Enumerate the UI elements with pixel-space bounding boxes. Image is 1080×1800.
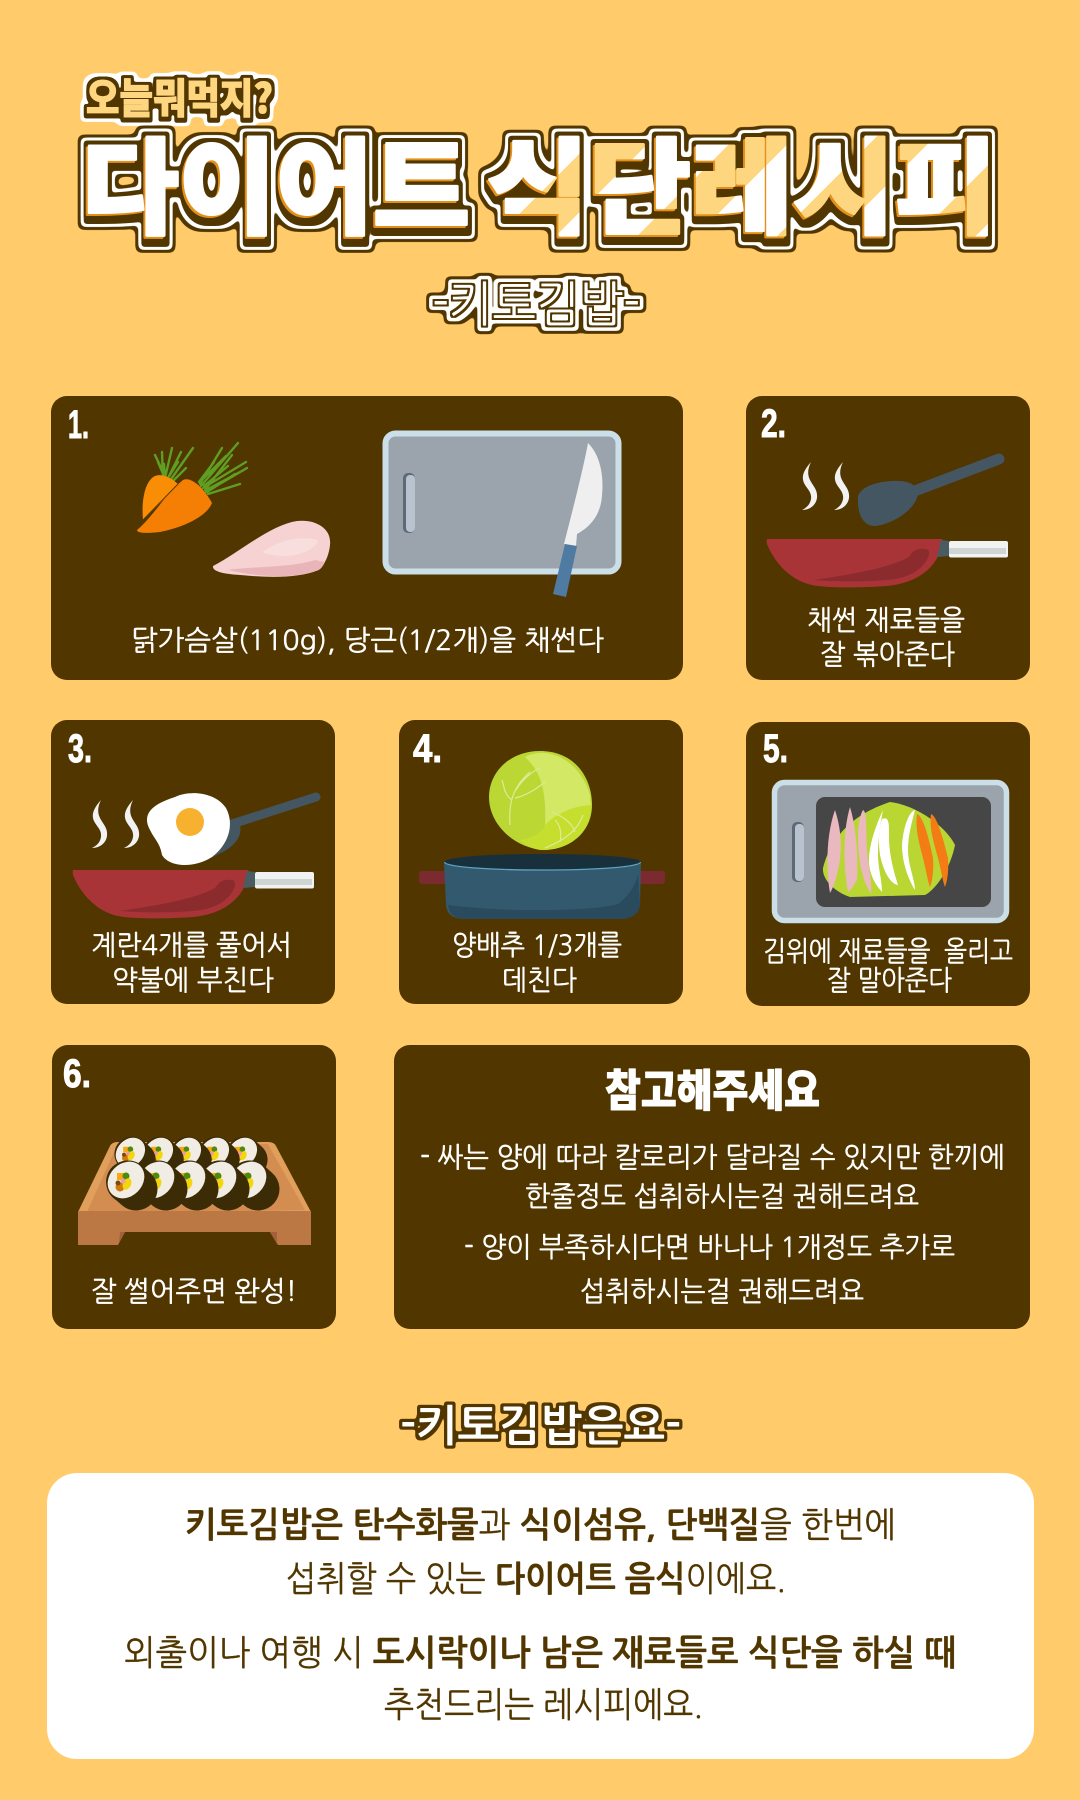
icon: board with kimbap ingredients <box>774 782 1006 920</box>
panel: step 5 <box>746 722 1030 1006</box>
icon: chicken breast <box>213 521 330 577</box>
notes text <box>420 1143 1005 1306</box>
caption: 약불에 부친다 <box>112 966 275 995</box>
caption <box>452 931 622 995</box>
step number 2: 2. <box>761 402 786 446</box>
icon: wooden tray <box>78 1142 311 1245</box>
icon: cutting board <box>386 434 618 572</box>
panel: step 4 <box>399 720 683 1004</box>
summary paragraph 2 <box>124 1635 956 1723</box>
subtitle: 키토김밥: -키토김밥- <box>432 280 640 328</box>
caption: 계란4개를 풀어서 <box>91 931 292 960</box>
caption: 닭가슴살(110g), 당근(1/2개)을 채썬다 <box>131 626 605 655</box>
title: 다이어트 식단레시피 <box>82 65 997 255</box>
icon: spatula <box>858 459 999 526</box>
main title second word: 식단레시피 <box>487 104 997 255</box>
icon: pot <box>419 854 665 919</box>
summary paragraph 2: 외출이나 여행 시 도시락이나 남은 재료들로 식단을 하실 때 <box>124 1635 956 1671</box>
panel: summary <box>47 1473 1034 1759</box>
icon: cabbage <box>489 751 592 850</box>
caption <box>807 606 965 669</box>
summary paragraph 1 <box>185 1507 896 1597</box>
summary paragraph 2: 추천드리는 레시피에요. <box>384 1688 703 1723</box>
caption: 잘 볶아준다 <box>820 640 956 669</box>
step number 6: 6. <box>63 1052 91 1096</box>
icon: frying pan <box>767 539 1008 587</box>
notes text: 한줄정도 섭취하시는걸 권해드려요 <box>525 1182 919 1211</box>
panel: notes <box>394 1045 1030 1329</box>
notes text: - 양이 부족하시다면 바나나 1개정도 추가로 <box>464 1233 955 1262</box>
caption: 양배추 1/3개를 <box>452 931 622 960</box>
icon: spatula <box>210 797 316 858</box>
step number 3: 3. <box>68 727 92 771</box>
icon: fried egg <box>147 793 230 865</box>
icon: steam <box>802 462 849 510</box>
notes text: - 싸는 양에 따라 칼로리가 달라질 수 있지만 한끼에 <box>420 1143 1005 1172</box>
panel: step 2 <box>746 396 1030 680</box>
icon: kimbap rolls <box>100 1132 274 1206</box>
panel: step 6 <box>52 1045 336 1329</box>
caption: 잘 썰어주면 완성! <box>91 1277 297 1306</box>
icon: carrots <box>137 443 247 533</box>
icon: knife <box>553 443 602 597</box>
caption: 데친다 <box>502 966 578 995</box>
step number 5: 5. <box>763 727 788 771</box>
heading: 키토김밥은요: -키토김밥은요- <box>400 1404 681 1448</box>
step number 1: 1. <box>68 403 89 447</box>
notes heading: 참고해주세요 <box>605 1055 820 1119</box>
panel: step 1 <box>51 396 683 680</box>
caption: 채썬 재료들을 <box>807 606 965 635</box>
icon: frying pan <box>73 870 314 918</box>
icon: steam <box>92 800 139 848</box>
notes text: 섭취하시는걸 권해드려요 <box>580 1277 864 1306</box>
caption <box>763 937 1013 995</box>
caption <box>91 931 292 995</box>
summary paragraph 1: 섭취할 수 있는 다이어트 음식이에요. <box>286 1561 786 1597</box>
main title first word: 다이어트 <box>82 104 470 255</box>
panel: step 3 <box>51 720 335 1004</box>
caption: 김위에 재료들을 올리고 <box>763 937 1013 966</box>
summary paragraph 1: 키토김밥은 탄수화물과 식이섬유, 단백질을 한번에 <box>185 1507 896 1543</box>
step number 4: 4. <box>413 727 442 771</box>
caption: 잘 말아준다 <box>827 966 953 995</box>
kicker: 오늘뭐먹지?: 오늘뭐먹지? <box>86 65 273 125</box>
